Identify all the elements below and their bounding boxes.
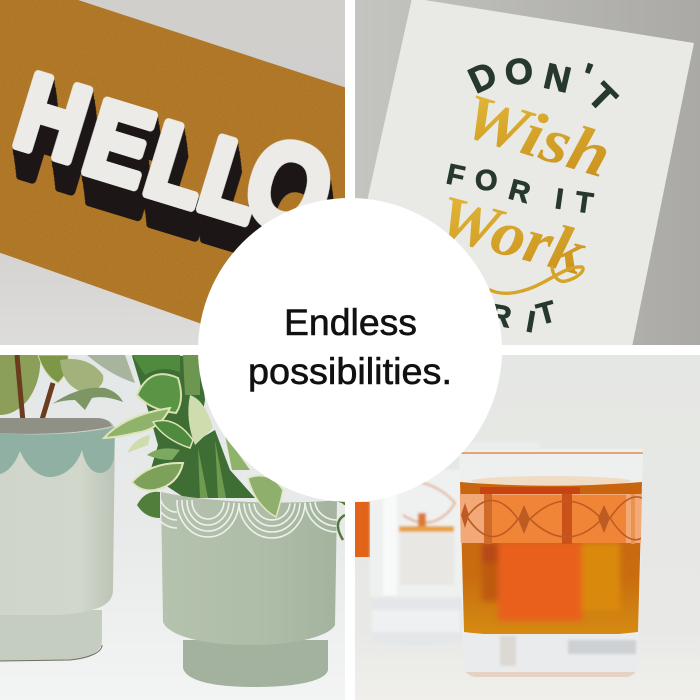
left pot xyxy=(0,418,115,661)
print lettering xyxy=(446,58,620,333)
heading: Endless xyxy=(284,302,417,343)
HELLO lettering: O xyxy=(231,110,347,264)
print lettering: RIT xyxy=(487,295,560,339)
doormat xyxy=(0,0,347,347)
background glass xyxy=(368,471,462,632)
orange block behind xyxy=(355,502,370,557)
glass base xyxy=(484,634,618,636)
heading xyxy=(248,302,452,392)
print lettering: DON'T xyxy=(462,50,625,119)
heading: possibilities. xyxy=(248,351,452,392)
draped leaf and vine xyxy=(248,476,283,517)
right pot foot xyxy=(183,640,328,687)
panel: gold foil typographic print photo xyxy=(355,0,700,347)
callout circle with heading xyxy=(198,198,502,502)
panel: hello doormat photo xyxy=(0,0,347,347)
patterned band xyxy=(459,494,643,543)
panel: amber glass photo xyxy=(355,355,700,700)
HELLO lettering: HELL xyxy=(1,51,278,247)
left plant xyxy=(0,355,135,418)
amber liquid xyxy=(460,482,642,636)
print lettering: Wish xyxy=(455,79,619,191)
right plant xyxy=(104,355,255,518)
foreground amber glass xyxy=(459,449,643,677)
right pot xyxy=(150,476,345,645)
panel: potted plants photo xyxy=(0,355,345,700)
print lettering: FOR IT xyxy=(444,159,595,220)
white scallop arcs xyxy=(150,498,337,538)
gold swash xyxy=(490,267,583,293)
print lettering: Work xyxy=(430,181,594,288)
print sheet xyxy=(355,0,694,347)
